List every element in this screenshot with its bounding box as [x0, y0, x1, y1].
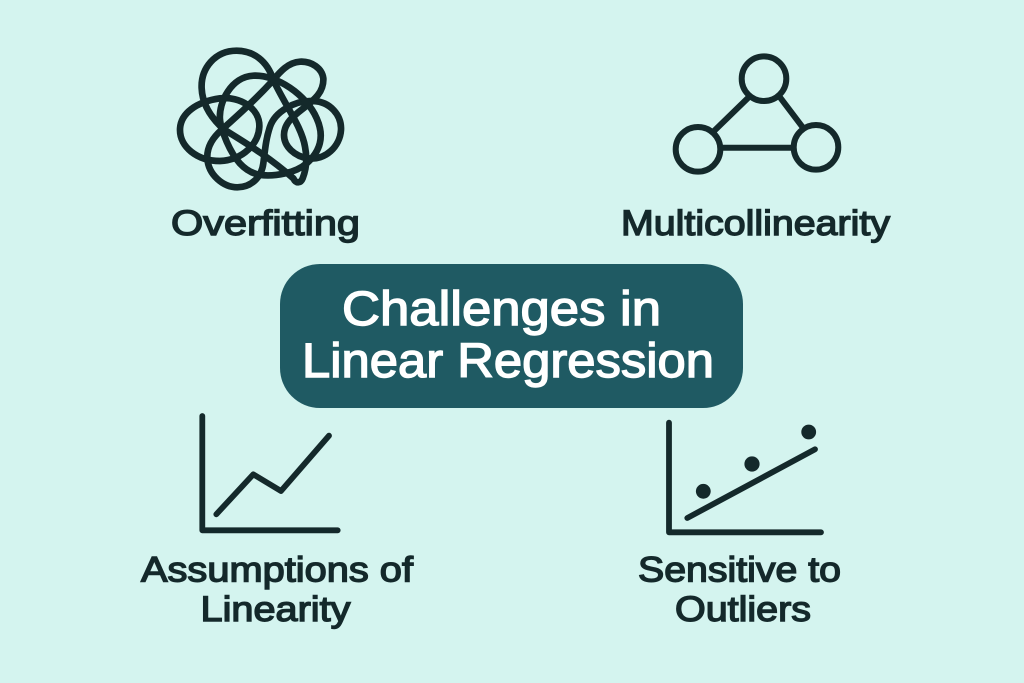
icon: tangled loops (overfitting): [180, 51, 341, 187]
title line 2: Linear Regression: [302, 335, 714, 388]
title panel: [280, 264, 743, 408]
label: Assumptions of Linearity: Assumptions of: [141, 550, 413, 590]
label: Sensitive to Outliers: Sensitive to: [638, 550, 841, 590]
icon: scatter plot with trend line (sensitive to outliers): [669, 423, 821, 532]
label: Assumptions of Linearity: [141, 550, 413, 629]
label: Assumptions of Linearity: Linearity: [200, 590, 351, 629]
icon: connected triangle nodes (multicollinearity): [676, 56, 838, 172]
title line 1: Challenges in: [342, 283, 661, 336]
label: Overfitting: Overfitting: [171, 204, 360, 243]
label: Sensitive to Outliers: [638, 550, 841, 629]
label: Multicollinearity: Multicollinearity: [621, 204, 891, 243]
icon: line chart (assumptions of linearity): [202, 416, 338, 530]
label: Sensitive to Outliers: Outliers: [675, 590, 811, 629]
